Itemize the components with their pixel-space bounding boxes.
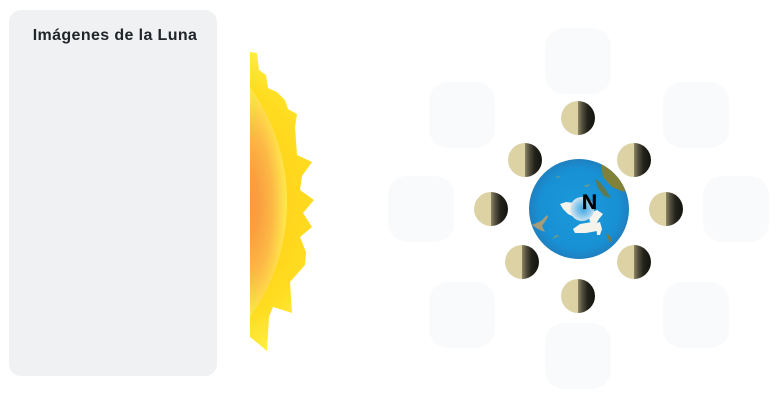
landmass: white xyxy=(560,202,573,216)
moon: lower right xyxy=(617,245,651,279)
landmass: tan xyxy=(532,215,548,232)
sun xyxy=(250,52,314,351)
moon: upper right xyxy=(617,143,651,177)
moon: left xyxy=(474,192,508,226)
slot: left xyxy=(388,176,454,242)
label: north: N xyxy=(582,191,597,214)
slot: upper right xyxy=(663,82,729,148)
moon: top xyxy=(561,101,595,135)
slot: top xyxy=(545,28,611,94)
landmass: olive xyxy=(601,164,626,192)
moon: right xyxy=(649,192,683,226)
slot: bottom xyxy=(545,323,611,389)
diagram: sun, earth and moon phases xyxy=(250,52,683,351)
sun core xyxy=(250,87,287,317)
earth xyxy=(529,158,632,259)
sun rays xyxy=(250,52,314,351)
slot: lower left xyxy=(429,282,495,348)
slot: upper left xyxy=(429,82,495,148)
heading: moon images: Imágenes de la Luna xyxy=(33,27,197,44)
moon: lower left xyxy=(505,245,539,279)
panel: moon images xyxy=(9,10,217,376)
slot: right xyxy=(703,176,769,242)
moon: bottom xyxy=(561,279,595,313)
slot: lower right xyxy=(663,282,729,348)
moon: upper left xyxy=(508,143,542,177)
arctic ice xyxy=(570,197,594,221)
